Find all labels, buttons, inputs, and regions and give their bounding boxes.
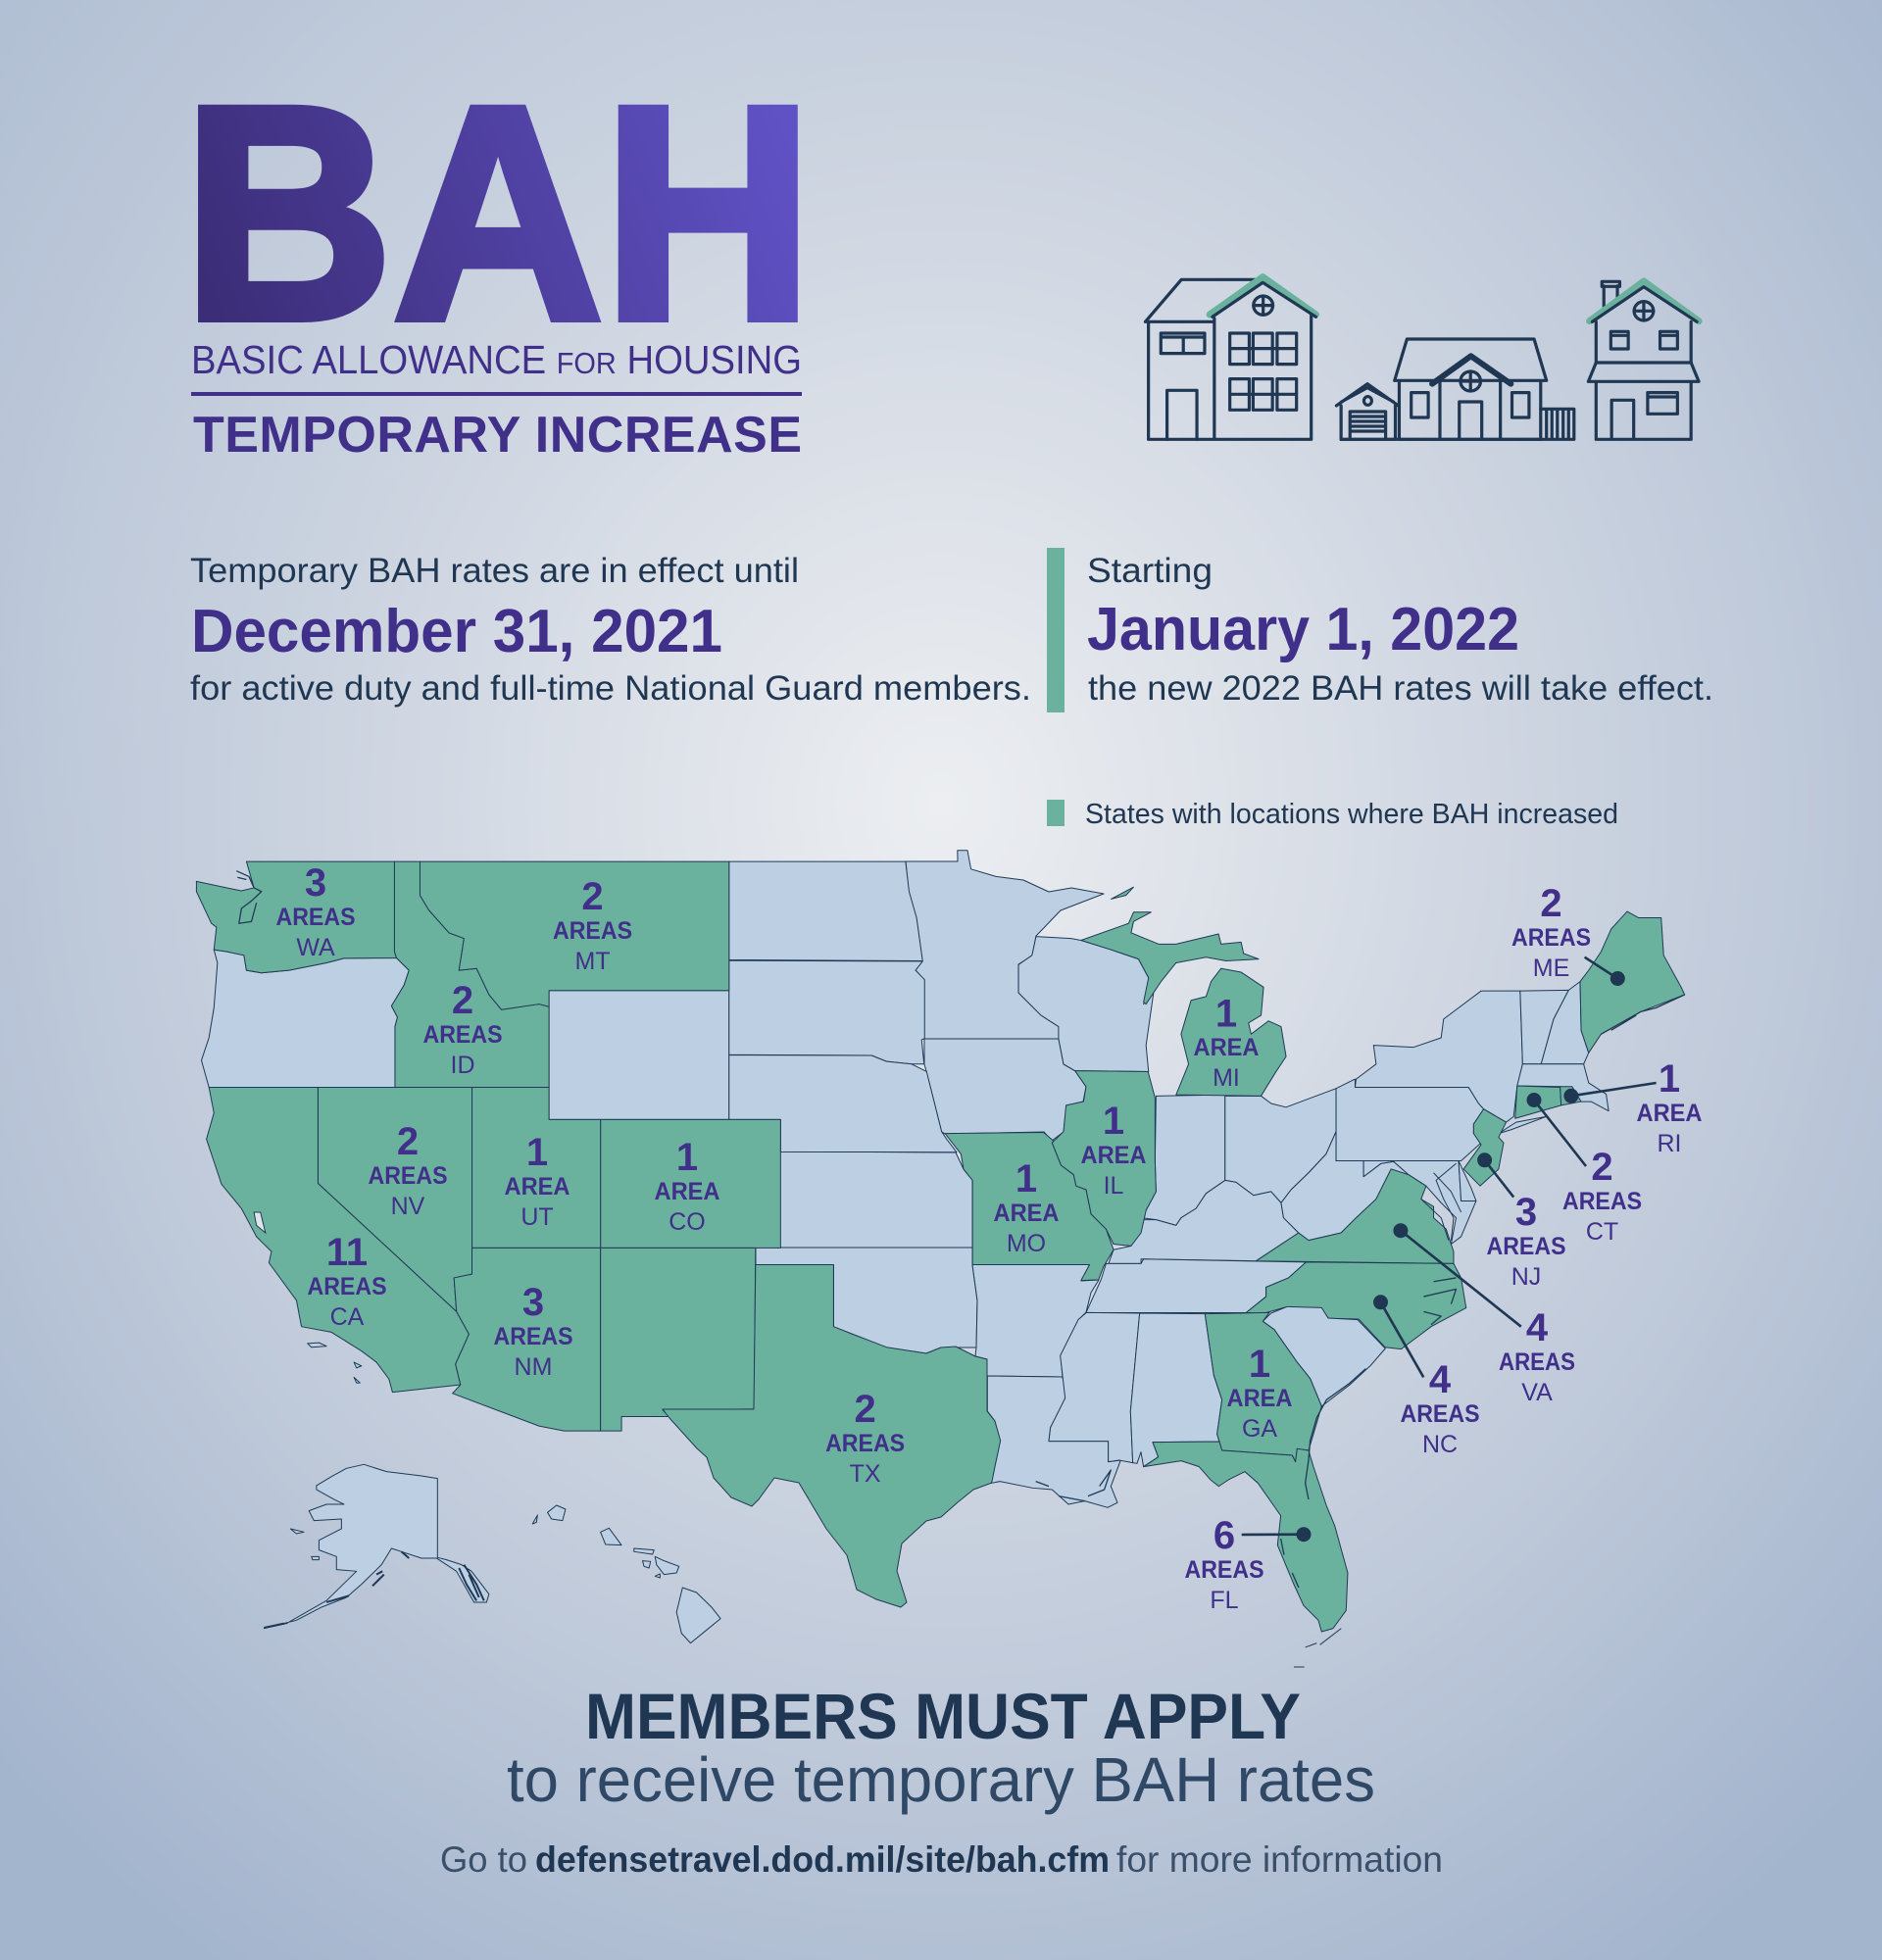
state: Idaho xyxy=(391,861,549,1088)
state: Delaware xyxy=(1459,1161,1476,1200)
state: Tennessee xyxy=(1086,1259,1306,1313)
Isle Royale xyxy=(1111,887,1133,899)
divider rule xyxy=(191,392,802,396)
Mississippi delta detail xyxy=(1036,1470,1111,1501)
state: Minnesota xyxy=(906,851,1104,1039)
label: MT: AREAS xyxy=(553,917,632,945)
Alaska and Hawaii xyxy=(264,1464,720,1643)
label: VA xyxy=(1499,1306,1575,1406)
subtitle: temporary increase: TEMPORARY INCREASE xyxy=(193,407,802,464)
website line: defensetravel.dod.mil/site/bah.cfm xyxy=(535,1839,1110,1880)
label: GA xyxy=(1227,1343,1292,1443)
label: ME: AREAS xyxy=(1511,924,1591,952)
label: MO: MO xyxy=(1007,1230,1046,1257)
state: Missouri xyxy=(945,1132,1114,1281)
state: Mississippi xyxy=(1049,1312,1140,1463)
icon: small house with garage xyxy=(1336,339,1574,439)
state: Texas xyxy=(663,1264,1001,1607)
map: non-highlighted states in the real-coordinate set xyxy=(756,851,1104,1377)
state: North Carolina xyxy=(1246,1262,1466,1349)
label: VA: AREAS xyxy=(1499,1348,1575,1376)
label: NC: AREAS xyxy=(1400,1400,1480,1428)
icon: two-story house with chimney xyxy=(1588,281,1699,439)
state: Connecticut xyxy=(1515,1086,1561,1118)
state: Indiana xyxy=(1142,1095,1225,1225)
state: New Mexico xyxy=(601,1248,756,1431)
legend text: States with locations where BAH increased xyxy=(1085,799,1618,830)
leader: Rhode Island xyxy=(1563,1083,1657,1103)
state: Washington xyxy=(196,861,396,973)
date: January 1, 2022: January 1, 2022 xyxy=(1087,596,1519,663)
label: UT xyxy=(504,1131,570,1231)
label: MI: MI xyxy=(1213,1064,1240,1092)
label: CO xyxy=(655,1136,719,1236)
label: ME: ME xyxy=(1533,955,1569,982)
state: Nevada xyxy=(318,1088,472,1311)
state: Kentucky xyxy=(1109,1180,1299,1263)
call to action xyxy=(440,1680,1443,1880)
Alaska panhandle detail xyxy=(264,1551,484,1628)
label: NM xyxy=(494,1281,572,1381)
label: CT: AREAS xyxy=(1562,1188,1642,1215)
state: Montana xyxy=(420,861,729,1009)
label: UT: UT xyxy=(520,1203,554,1231)
label: UT: 1 xyxy=(526,1131,548,1174)
label: MI xyxy=(1194,992,1259,1092)
state: Alabama xyxy=(1130,1313,1222,1467)
map: western states xyxy=(196,861,957,1431)
label: TX: AREAS xyxy=(825,1430,905,1457)
label: CT: CT xyxy=(1586,1218,1618,1246)
label: NV xyxy=(369,1120,447,1220)
website line: for more information xyxy=(1116,1839,1443,1880)
state: Arizona xyxy=(453,1248,601,1431)
lead-in: starting: Starting xyxy=(1087,552,1213,590)
label: TX: 2 xyxy=(854,1388,876,1431)
label: MI: 1 xyxy=(1215,992,1237,1035)
divider bar xyxy=(1047,548,1065,712)
label: ID: AREAS xyxy=(423,1021,502,1049)
label: CT: 2 xyxy=(1591,1146,1613,1189)
label: ME xyxy=(1511,882,1591,982)
map: central and eastern states xyxy=(945,887,1685,1349)
title: BAH: BAH xyxy=(182,43,814,382)
label: GA: 1 xyxy=(1249,1343,1270,1386)
label: CA: AREAS xyxy=(308,1273,386,1300)
label: MT: MT xyxy=(574,948,611,975)
label: WA: 3 xyxy=(305,861,326,905)
icon: large house xyxy=(1145,277,1315,439)
label: VA: VA xyxy=(1521,1379,1553,1406)
lead-in: in effect until: Temporary BAH rates are in effect until xyxy=(190,552,799,590)
label: NJ xyxy=(1486,1191,1566,1291)
state: New Hampshire xyxy=(1541,982,1589,1064)
label: CT xyxy=(1562,1146,1642,1246)
state: Louisiana xyxy=(987,1376,1120,1507)
label: NM: NM xyxy=(515,1353,552,1381)
state: West Virginia xyxy=(1281,1132,1409,1241)
label: CA: 11 xyxy=(326,1231,368,1274)
label: MT: 2 xyxy=(581,875,604,918)
label: MO: 1 xyxy=(1015,1157,1037,1200)
state: Wisconsin xyxy=(1018,937,1154,1071)
label: VA: 4 xyxy=(1526,1306,1549,1349)
California channel islands xyxy=(308,1343,362,1383)
label: IL: IL xyxy=(1104,1172,1124,1200)
label: FL: FL xyxy=(1210,1587,1239,1614)
state: South Dakota xyxy=(729,960,924,1064)
label: WA: WA xyxy=(296,934,335,961)
state: Nebraska xyxy=(729,1055,957,1152)
state: Florida xyxy=(1144,1442,1348,1632)
state: New Jersey xyxy=(1463,1109,1507,1186)
label: CO: CO xyxy=(669,1208,706,1236)
label: NV: AREAS xyxy=(369,1162,447,1190)
label: NC: 4 xyxy=(1429,1358,1452,1401)
state: California xyxy=(207,1088,469,1393)
label: NJ: NJ xyxy=(1511,1263,1541,1291)
leader: Florida xyxy=(1242,1527,1312,1542)
state: Michigan lower peninsula xyxy=(1176,968,1286,1096)
label: MI: AREA xyxy=(1194,1034,1259,1061)
subtitle: basic allowance for housing: BASIC ALLOWANCE FOR HOUSING xyxy=(191,337,802,382)
label: RI: RI xyxy=(1657,1130,1682,1157)
label: CO: 1 xyxy=(676,1136,698,1179)
title block xyxy=(182,43,814,464)
state: Kansas xyxy=(780,1152,972,1248)
label: ID: ID xyxy=(451,1052,474,1079)
label: WA xyxy=(276,861,355,961)
state: Ohio xyxy=(1225,1089,1336,1202)
label: FL: AREAS xyxy=(1184,1556,1264,1584)
label: WA: AREAS xyxy=(276,904,355,931)
leader: Connecticut xyxy=(1527,1093,1586,1166)
Alaskan islands xyxy=(290,1529,319,1560)
label: ID xyxy=(423,979,502,1079)
state: Pennsylvania xyxy=(1336,1079,1484,1161)
leader: North Carolina xyxy=(1373,1295,1423,1377)
Chesapeake Bay detail xyxy=(1421,1163,1461,1241)
label: IL xyxy=(1080,1100,1147,1200)
state: New York xyxy=(1355,991,1522,1122)
label: GA: GA xyxy=(1242,1415,1277,1443)
label: NJ: 3 xyxy=(1515,1191,1537,1234)
Long Island xyxy=(1499,1116,1546,1134)
label: ME: 2 xyxy=(1540,882,1562,925)
state: Wyoming xyxy=(549,991,729,1119)
label: CA: CA xyxy=(330,1303,365,1331)
label: NJ: AREAS xyxy=(1486,1233,1566,1260)
state: Virginia xyxy=(1256,1169,1454,1263)
detail: new rates take effect: the new 2022 BAH rates will take effect. xyxy=(1088,669,1713,708)
label: RI xyxy=(1637,1057,1702,1157)
label: IL: AREA xyxy=(1080,1142,1147,1169)
label: NC xyxy=(1400,1358,1480,1458)
leader: Virginia xyxy=(1393,1223,1521,1327)
state: Rhode Island xyxy=(1560,1087,1581,1105)
San Francisco Bay detail xyxy=(254,1212,266,1233)
label: RI: AREA xyxy=(1637,1100,1702,1127)
leader: Maine xyxy=(1585,957,1625,986)
label: UT: AREA xyxy=(504,1173,570,1200)
label: FL xyxy=(1184,1514,1264,1614)
state: Illinois xyxy=(1052,1071,1156,1246)
label: MO xyxy=(994,1157,1059,1257)
state: Maine xyxy=(1580,911,1685,1053)
map: southern states xyxy=(987,1306,1385,1667)
legend swatch xyxy=(1047,800,1065,826)
label: NV: 2 xyxy=(397,1120,419,1163)
state: Vermont xyxy=(1520,990,1568,1064)
leader: New Jersey xyxy=(1477,1152,1513,1198)
leader lines and location dots xyxy=(1242,957,1657,1542)
label: GA: AREA xyxy=(1227,1385,1292,1412)
southeast coast detail xyxy=(1281,1369,1365,1588)
state: Maryland xyxy=(1363,1161,1476,1244)
date: December 31, 2021: December 31, 2021 xyxy=(191,598,722,665)
label: CO: AREA xyxy=(655,1178,719,1205)
state: Hawaii xyxy=(532,1505,720,1643)
label: RI: 1 xyxy=(1659,1057,1680,1101)
label: ID: 2 xyxy=(452,979,473,1022)
label: FL: 6 xyxy=(1213,1514,1235,1557)
label: TX: TX xyxy=(850,1460,881,1488)
Puget Sound detail xyxy=(236,871,262,923)
state: Oregon xyxy=(202,950,409,1088)
icon: three houses xyxy=(1145,277,1699,439)
Maine coast detail xyxy=(1601,995,1685,1034)
detail: who it applies to: for active duty and full-time National Guard members. xyxy=(190,669,1031,708)
subheading: to receive temporary rates: to receive temporary BAH rates xyxy=(507,1744,1375,1815)
state: Georgia xyxy=(1205,1312,1321,1462)
label: NM: 3 xyxy=(522,1281,544,1324)
label: MO: AREA xyxy=(994,1200,1059,1227)
label: IL: 1 xyxy=(1103,1100,1124,1143)
state: Massachusetts xyxy=(1517,1064,1609,1111)
North Carolina sounds detail xyxy=(1423,1278,1457,1325)
state: Utah xyxy=(472,1088,601,1248)
state: Arkansas xyxy=(972,1264,1099,1377)
label: TX xyxy=(825,1388,905,1488)
state: Michigan upper peninsula xyxy=(1081,912,1259,1004)
state: Iowa xyxy=(924,1039,1086,1141)
text block: new rates xyxy=(1087,552,1713,708)
text block: temporary rates xyxy=(190,552,1031,708)
state: Colorado xyxy=(601,1119,780,1248)
map labels xyxy=(276,861,1702,1614)
label: MT xyxy=(553,875,632,975)
state: South Carolina xyxy=(1263,1306,1385,1406)
state: Alaska xyxy=(264,1464,489,1629)
label: NM: AREAS xyxy=(494,1323,572,1350)
state: Oklahoma xyxy=(756,1248,977,1353)
website line xyxy=(440,1839,1443,1880)
label: NC: NC xyxy=(1422,1431,1458,1458)
label: NV: NV xyxy=(391,1193,425,1220)
label: CA xyxy=(308,1231,386,1331)
legend xyxy=(1047,799,1618,830)
Florida Keys xyxy=(1294,1629,1341,1667)
state: North Dakota xyxy=(729,861,922,961)
heading: members must apply: MEMBERS MUST APPLY xyxy=(585,1680,1301,1752)
map of the United States xyxy=(196,851,1703,1667)
website line: Go to xyxy=(440,1839,527,1880)
